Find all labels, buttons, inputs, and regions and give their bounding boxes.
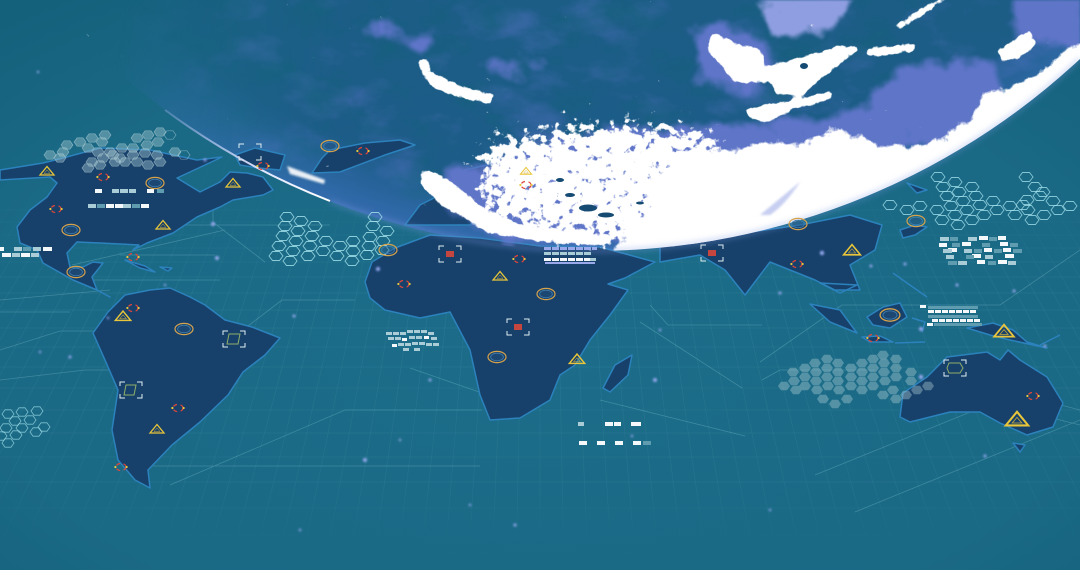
data blocks: dim cells [23,189,1022,445]
glowing particles [37,71,1047,531]
data blocks: white cells [0,189,1014,445]
globe clouds [360,0,1080,270]
land: south america [93,288,280,488]
hexagon cluster: indian ocean filled [778,351,934,408]
land: island outlines [820,273,1060,345]
clouds: periwinkle layer [360,0,1080,245]
land: canadian arctic island [235,148,285,170]
land: new guinea [967,323,1047,348]
markers: triangles [40,166,1028,433]
land: sumatra and borneo [810,183,927,342]
clouds: pale high patch [755,0,865,38]
world map land masses [0,140,1063,488]
clouds: mottled white [480,122,730,250]
clouds: thin white patches [416,0,1037,246]
rim highlight [165,110,330,201]
markers: orange rings [62,140,925,363]
hexagon cluster: atlantic outline [269,212,394,266]
map markers [40,140,1040,471]
land: caribbean islands [125,260,172,272]
perspective grid [0,234,1080,508]
data blocks: light cells [12,189,1016,426]
land: asia [660,215,882,295]
land: australia [900,350,1063,452]
hexagon cluster: north america [44,128,190,172]
land: madagascar [603,355,632,392]
globe dark terrain [286,2,869,184]
hexagon cluster: lower left [0,407,50,447]
rim cloud streaks [287,166,325,184]
clouds: dark specks [556,63,808,218]
globe base [148,0,1080,250]
globe rim light [165,59,1080,251]
globe terrain haze [236,0,1048,184]
globe rim glow [148,19,1080,250]
land: north america [0,148,273,297]
land: africa and arabia [365,235,655,420]
rim glow [330,59,1080,251]
clouds: solid white [613,43,1080,251]
markers: red and yellow dashed rings [49,147,1040,471]
clouds: soft shadow swirl [760,182,800,215]
connector lines [0,190,1080,512]
hexagon cluster: pacific outline [883,172,1077,230]
data blocks [0,189,1022,445]
land: greenland [312,140,415,173]
data blocks: periwinkle cells [544,247,597,264]
land: europe [405,162,530,225]
markers: white bracket targets [120,144,966,398]
